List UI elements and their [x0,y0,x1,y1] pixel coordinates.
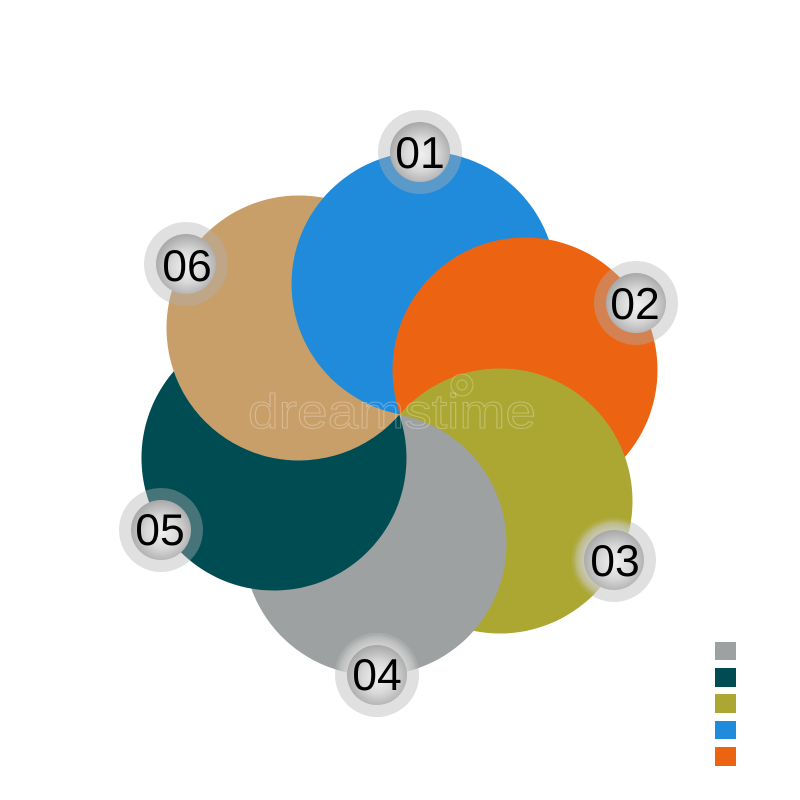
badge 03: 03 [590,537,640,586]
swirl of six overlapping circles [141,152,658,675]
badge 02: 02 [610,280,660,329]
badge 06 [144,222,228,306]
crescent: teal segment 05 [141,371,406,591]
badge 04: 04 [352,651,402,700]
watermark spiral [451,374,473,396]
badge 05: 05 [135,506,185,555]
watermark word: dreamstime [248,386,536,439]
circle: tan segment 06 [166,196,432,460]
crescent: grey segment 04 [243,415,506,675]
infographic canvas [119,110,736,766]
watermark [248,374,536,439]
circle: blue segment 01 [292,152,556,416]
colour legend swatches [715,642,736,766]
badge 03 [572,518,656,602]
badge 01: 01 [395,129,445,178]
circle: olive segment 03 [368,368,632,634]
badge 05 [119,488,203,572]
badge 02 [594,261,678,345]
circle: orange segment 02 [392,238,658,502]
badge 01 [378,110,462,194]
badge 06: 06 [162,242,212,291]
badge 04 [335,633,419,717]
